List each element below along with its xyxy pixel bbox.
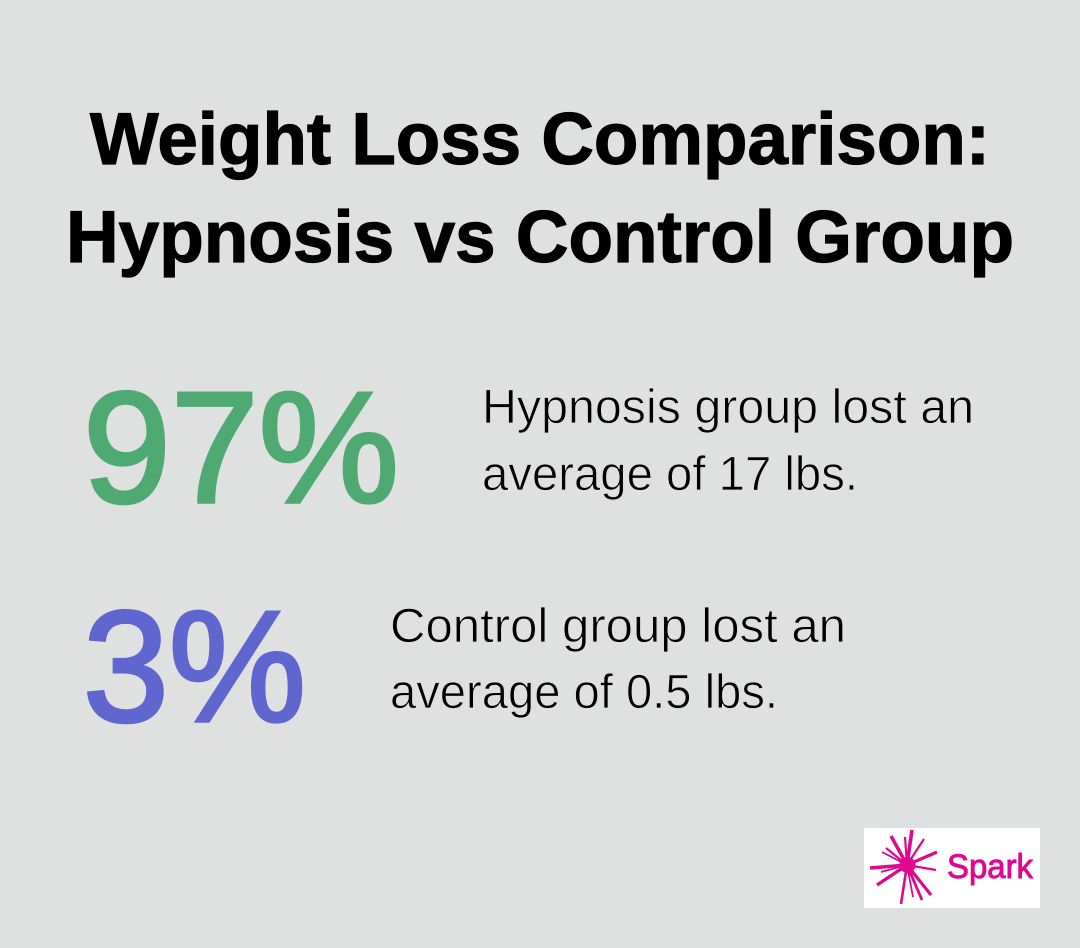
logo wordmark: Spark: [947, 848, 1034, 886]
stat value: 97%: 97%: [83, 360, 399, 536]
stat: 3% control group: [83, 579, 846, 755]
stat description: hypnosis group: [482, 381, 974, 501]
stat description: control group: average of 0.5 lbs.: [390, 666, 778, 719]
stat: 97% hypnosis group: [83, 360, 974, 536]
title: [66, 99, 1014, 278]
stat description: hypnosis group: average of 17 lbs.: [482, 448, 858, 501]
title: Hypnosis vs Control Group: [66, 197, 1014, 278]
logo: Spark: [864, 828, 1040, 908]
stat description: hypnosis group: Hypnosis group lost an: [482, 381, 974, 434]
title: Weight Loss Comparison:: [90, 99, 990, 180]
stat value: 3%: 3%: [83, 579, 306, 755]
icon: starburst: [870, 830, 937, 904]
stat description: control group: [390, 600, 846, 719]
stat description: control group: Control group lost an: [390, 600, 846, 653]
